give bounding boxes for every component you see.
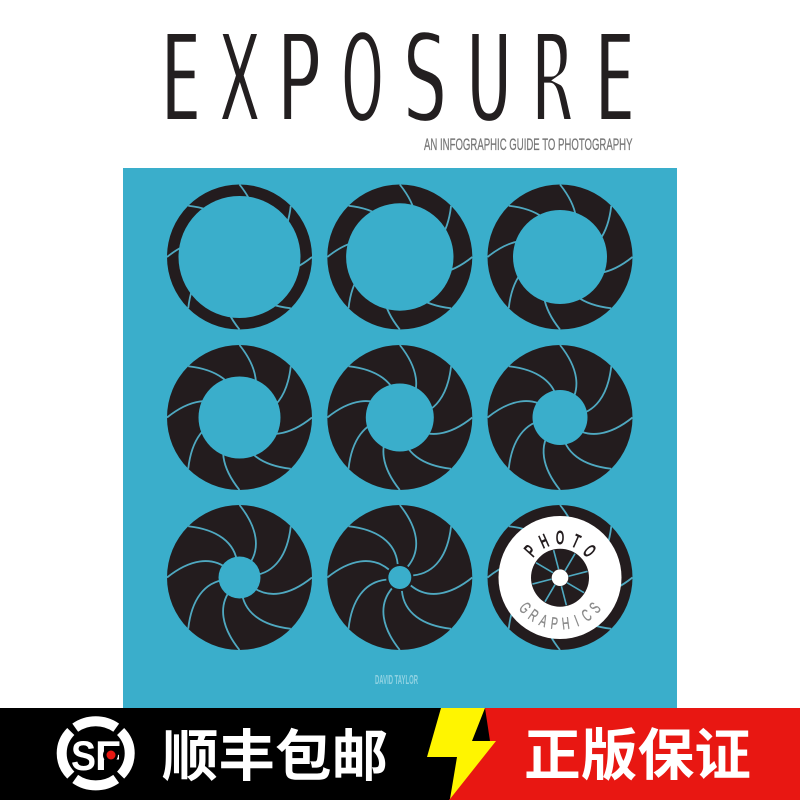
SF letter F: F [95,732,121,779]
logo text: graphics: P [550,613,559,633]
banner: black strip [0,708,800,800]
title: E [592,2,638,156]
logo text: graphics [515,598,604,633]
aperture 2 [327,184,472,330]
banner text: shunfeng: 顺丰包邮 [162,712,388,793]
title: S [400,2,451,156]
logo text: graphics: G [515,598,535,617]
banner text: genuine: 正版保证 [524,711,751,792]
logo text: graphics: H [561,613,571,633]
panel: blue cover [123,168,677,708]
logo text: photo: T [568,530,584,553]
aperture 6 [488,345,632,490]
logo text: graphics: S [585,599,604,617]
photographics logo [488,505,632,650]
title [159,2,638,157]
SF letters: S [71,732,96,779]
icon: lightning bolt [427,708,496,799]
logo text: graphics: R [525,605,542,625]
SF dot [103,748,118,762]
title: X [216,3,264,156]
subtitle: AN INFOGRAPHIC GUIDE TO PHOTOGRAPHY [424,135,632,154]
aperture 8 [327,505,472,650]
icon: SF logo [62,721,130,785]
title: E [159,2,204,156]
banner: red strip [449,708,800,800]
SF ring [62,721,130,785]
aperture 5 [327,345,472,490]
logo inner aperture [531,549,589,607]
logo text: graphics: C [578,605,595,625]
aperture 1 [167,184,312,330]
logo text: photo: O [556,527,564,549]
title: R [530,3,576,157]
title: U [464,3,514,156]
aperture 7 [167,505,312,650]
logo text: photo: P [520,541,542,561]
aperture 4 [167,345,312,490]
title: P [276,3,323,156]
logo text: photo: H [536,530,552,553]
logo outer ring [488,505,632,650]
aperture 3 [488,184,632,330]
title: O [340,3,385,156]
logo text: graphics: I [572,611,581,630]
logo text: graphics: A [537,610,551,631]
logo text: photo [520,527,600,562]
logo text: photo: O [578,541,600,562]
text: DAVID TAYLOR [375,672,418,687]
